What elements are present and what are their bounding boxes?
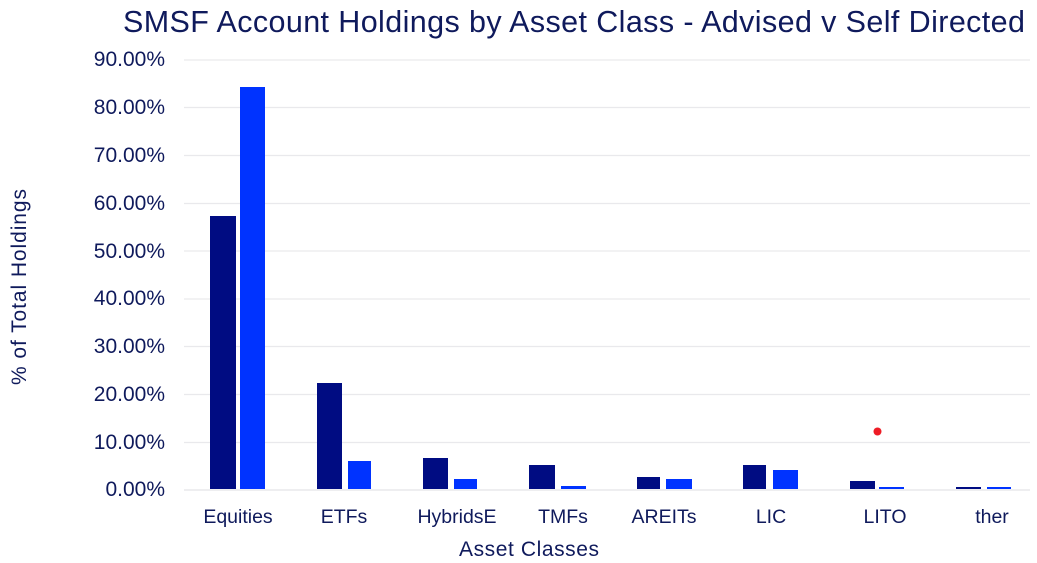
x axis category labels: Equities xyxy=(203,506,273,528)
red dot marker xyxy=(874,428,882,436)
x axis category labels: ther xyxy=(975,506,1009,528)
y axis labels xyxy=(94,48,165,501)
y axis labels: 90.00% xyxy=(94,48,165,71)
x axis category labels: LIC xyxy=(756,506,786,528)
y axis labels: 80.00% xyxy=(94,96,165,119)
y axis labels: 40.00% xyxy=(94,287,165,310)
bars: equities xyxy=(210,87,265,489)
y axis title: % of Total Holdings xyxy=(8,189,31,385)
y axis labels: 60.00% xyxy=(94,192,165,215)
bars: TMFs xyxy=(529,465,586,489)
x axis title: Asset Classes xyxy=(459,538,599,561)
x axis category labels: HybridsE xyxy=(417,506,497,528)
y axis labels: 30.00% xyxy=(94,335,165,358)
bars: LITO xyxy=(850,481,904,489)
bars: LIC xyxy=(743,465,798,489)
y axis labels: 50.00% xyxy=(94,240,165,263)
y axis labels: 0.00% xyxy=(105,478,165,501)
title: SMSF Account Holdings by Asset Class - Advised v Self Directed xyxy=(123,5,1025,39)
bars: ETFs xyxy=(317,383,371,489)
bars: hybrids xyxy=(423,458,477,489)
x axis category labels: LITO xyxy=(864,506,906,528)
y axis labels: 20.00% xyxy=(94,383,165,406)
y axis labels: 70.00% xyxy=(94,144,165,167)
x axis category labels: TMFs xyxy=(538,506,588,528)
bars: other xyxy=(956,487,1011,489)
bars: AREITs xyxy=(637,477,692,489)
x axis category labels: AREITs xyxy=(631,506,697,528)
x axis category labels xyxy=(203,506,1009,528)
y axis labels: 10.00% xyxy=(94,431,165,454)
x axis category labels: ETFs xyxy=(321,506,368,528)
